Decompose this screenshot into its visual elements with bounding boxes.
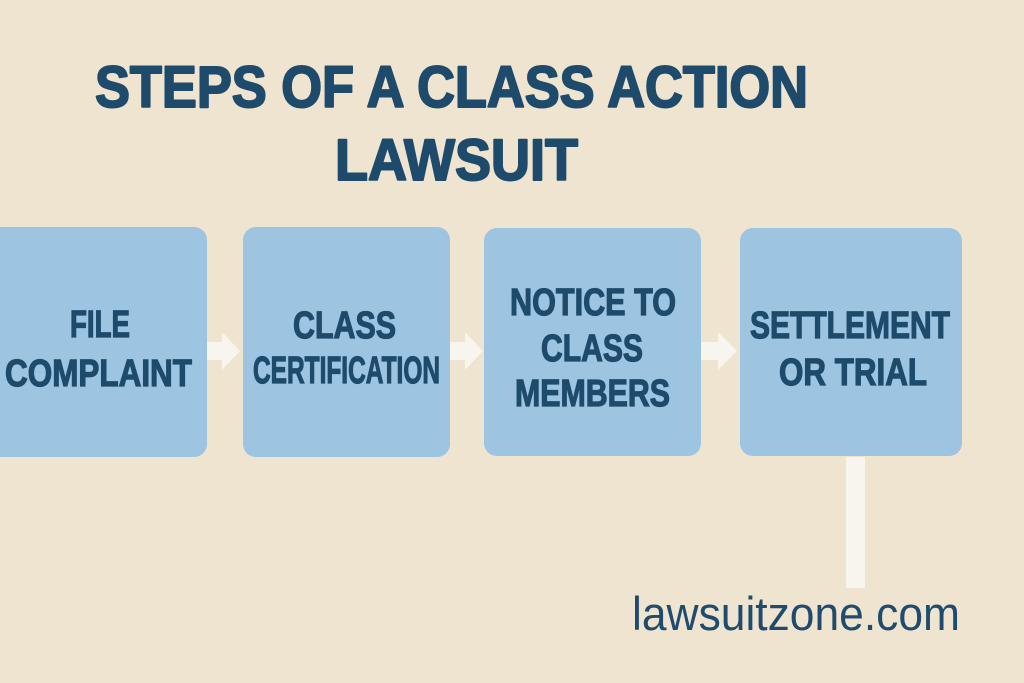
arrow 1 (207, 332, 240, 370)
box: file complaint: FILE (70, 304, 130, 346)
box: notice to class members (484, 228, 701, 456)
box: notice to class members: MEMBERS (515, 373, 670, 415)
box: class certification: CLASS (293, 305, 396, 347)
box: settlement or trial: OR TRIAL (779, 352, 927, 394)
arrow 2 (450, 332, 483, 370)
connector line (846, 457, 865, 588)
box: settlement or trial: SETTLEMENT (750, 305, 950, 347)
box: class certification (243, 227, 450, 457)
title: LAWSUIT (335, 128, 578, 193)
box: file complaint (0, 227, 207, 457)
website url: lawsuitzone.com (632, 587, 960, 640)
arrow 3 (701, 332, 737, 370)
box: class certification: CERTIFICATION (253, 350, 440, 392)
box: file complaint: COMPLAINT (5, 353, 192, 395)
box: notice to class members: CLASS (541, 328, 643, 370)
title: STEPS OF A CLASS ACTION (95, 55, 808, 120)
box: settlement or trial (740, 228, 962, 456)
box: notice to class members: NOTICE TO (510, 282, 676, 324)
title (95, 55, 808, 193)
